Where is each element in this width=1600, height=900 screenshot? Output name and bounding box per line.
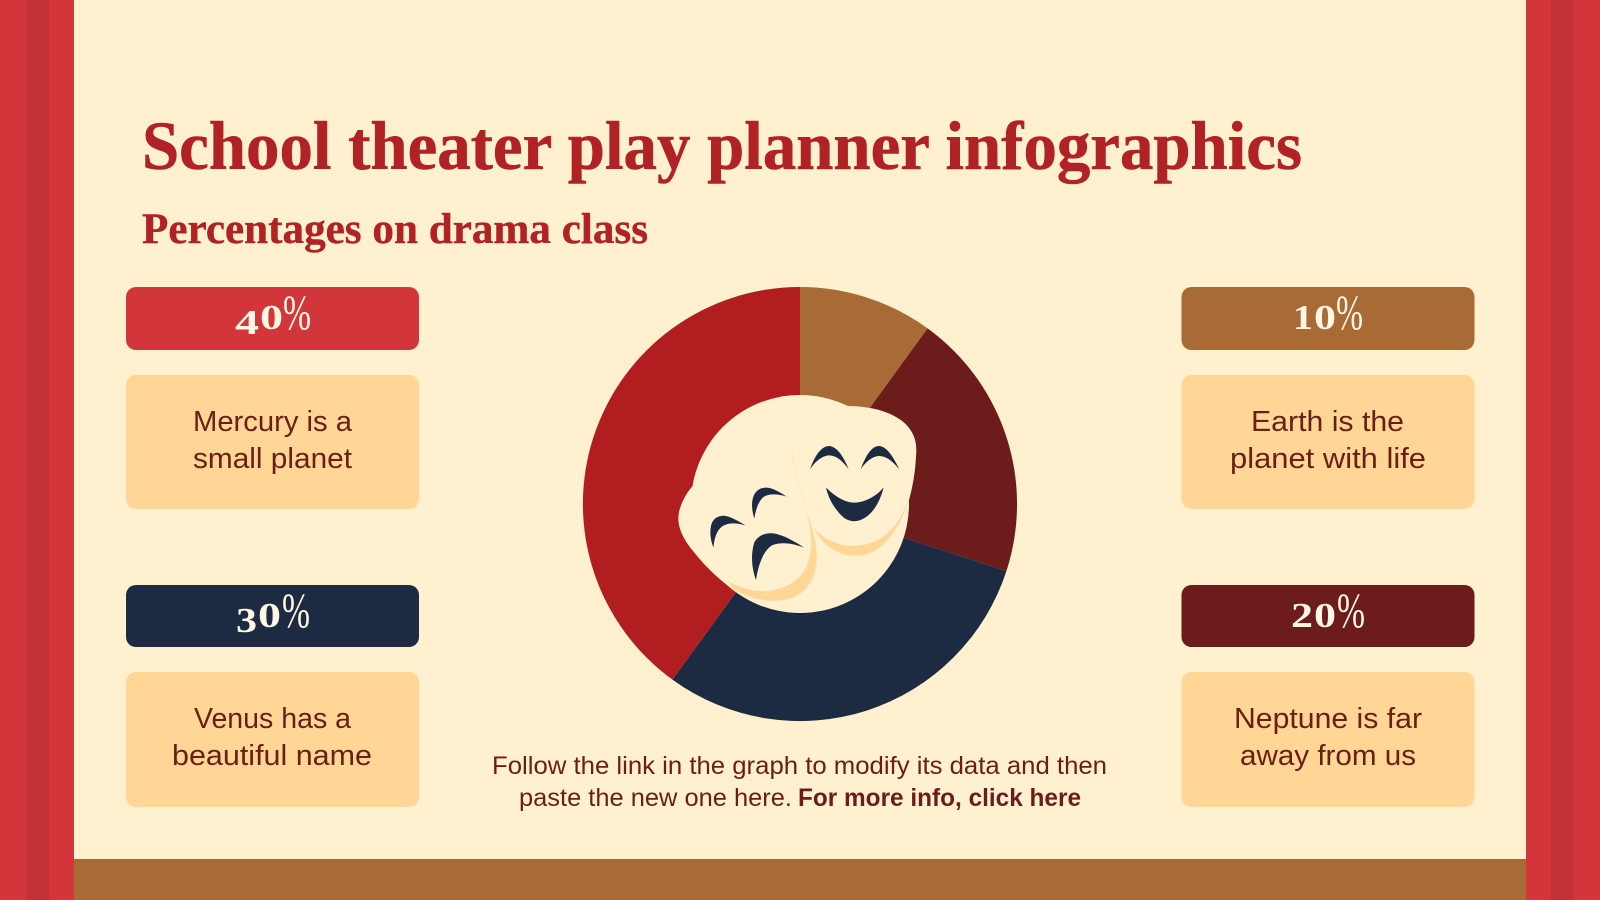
slice: 20% maroon <box>800 328 1017 571</box>
20% label: % <box>1337 582 1365 638</box>
Earth description: Earth is the <box>1251 406 1404 438</box>
slice: 40% red <box>583 287 800 680</box>
sad mask shadow <box>728 508 817 601</box>
panel: 30% Venus <box>126 582 419 807</box>
20% label <box>1182 582 1474 647</box>
happy mask silhouette <box>793 395 916 513</box>
happy eye right <box>861 446 899 469</box>
sad eye right <box>752 488 787 519</box>
subtitle: Percentages on drama class <box>142 206 648 253</box>
Mercury description <box>126 375 419 509</box>
20% label: 0 <box>1314 596 1336 635</box>
Venus description: Venus has a <box>194 703 352 735</box>
Earth description: planet with life <box>1230 443 1426 475</box>
happy mouth <box>826 487 884 521</box>
sad mouth <box>752 533 804 580</box>
40% label: 0 <box>260 298 283 337</box>
Neptune description: away from us <box>1240 740 1416 772</box>
Neptune description: Neptune is far <box>1234 703 1422 735</box>
happy mask shadow <box>814 492 911 556</box>
caption <box>492 752 1107 812</box>
donut chart with masks <box>583 287 1017 721</box>
Mercury description: small planet <box>193 443 352 475</box>
10% label: 1 <box>1293 298 1313 337</box>
left curtain <box>0 0 74 900</box>
Mercury description: Mercury is a <box>193 406 353 438</box>
sad mask silhouette <box>678 447 800 591</box>
Venus description: beautiful name <box>172 740 372 772</box>
crease <box>792 443 807 508</box>
caption: Follow the link in the graph to modify its data and then <box>492 752 1107 780</box>
30% label <box>126 582 419 647</box>
panel: 20% Neptune <box>1182 582 1474 807</box>
right curtain <box>1526 0 1600 900</box>
Earth description <box>1182 375 1474 509</box>
20% label: 2 <box>1291 596 1313 635</box>
Neptune description <box>1182 672 1474 807</box>
bottom stage bar <box>74 859 1526 900</box>
icon: theater masks <box>678 395 916 601</box>
panel: 40% Mercury <box>126 284 419 509</box>
slice: 30% navy <box>672 504 1006 721</box>
40% label: 4 <box>235 303 259 342</box>
panel: 10% Earth <box>1182 284 1474 509</box>
30% label: 0 <box>258 596 281 635</box>
Venus description <box>126 672 419 807</box>
happy eye left <box>810 446 849 469</box>
donut hole <box>691 395 909 613</box>
10% label: % <box>1336 284 1363 340</box>
title: School theater play planner infographics <box>142 108 1302 184</box>
30% label: 3 <box>236 601 257 640</box>
slice: 10% brown <box>800 287 928 504</box>
40% label: % <box>283 284 311 340</box>
40% label <box>126 284 419 350</box>
30% label: % <box>282 582 310 638</box>
10% label <box>1182 284 1474 350</box>
caption: paste the new one here. <box>519 784 792 812</box>
10% label: 0 <box>1314 298 1336 337</box>
sad eye left <box>710 516 745 548</box>
caption: For more info, click here <box>798 784 1081 812</box>
